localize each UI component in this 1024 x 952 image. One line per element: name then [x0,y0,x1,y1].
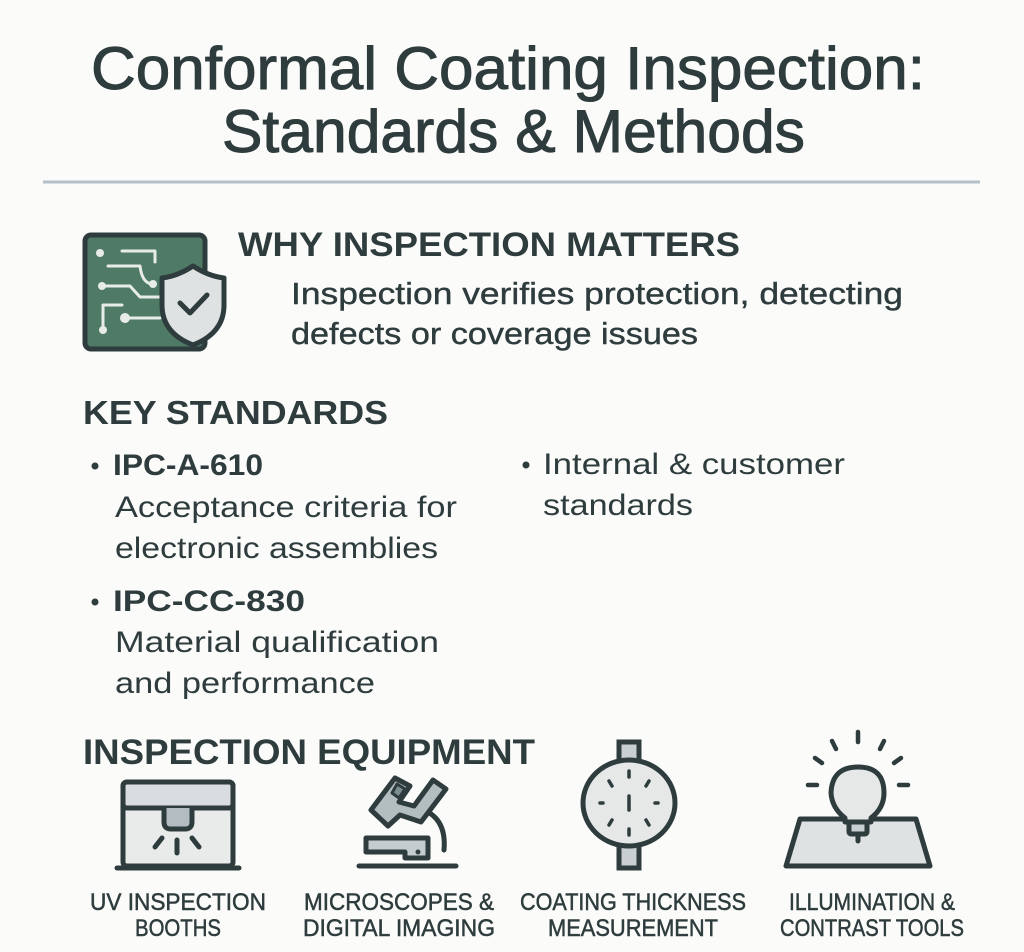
labels: equipment: UV INSPECTION [90,889,266,916]
icon: circuit board with shield [85,235,224,349]
standard: IPC-CC-830: Material qualification [115,626,439,659]
standard: IPC-A-610 [92,449,457,565]
standard: internal & customer: standards [543,489,693,522]
icon: UV booth [117,782,239,868]
text: why body: Inspection verifies protection, detecting [291,276,903,311]
labels: equipment: MEASUREMENT [548,915,718,942]
standard: internal & customer: Internal & customer [543,448,845,481]
standard: IPC-CC-830 [92,585,439,700]
icon: thickness gauge [583,742,675,868]
standard: IPC-CC-830: IPC-CC-830 [113,585,305,618]
text: why body: defects or coverage issues [291,316,698,351]
heading: inspection equipment: INSPECTION EQUIPMENT [83,733,535,772]
labels: equipment [90,889,964,942]
standard: IPC-CC-830: and performance [115,667,375,700]
labels: equipment: CONTRAST TOOLS [780,915,964,942]
title [91,35,925,165]
title: Standards & Methods [222,98,805,165]
heading: why inspection matters: WHY INSPECTION MATTERS [238,226,740,264]
labels: equipment: DIGITAL IMAGING [303,915,495,942]
standard: IPC-A-610: IPC-A-610 [113,449,263,482]
labels: equipment: BOOTHS [135,915,221,942]
title: Conformal Coating Inspection: [91,35,925,102]
standard: IPC-A-610: Acceptance criteria for [115,491,457,524]
standard: IPC-A-610: electronic assemblies [115,532,438,565]
text: why body [291,276,903,351]
heading: key standards: KEY STANDARDS [83,394,388,431]
labels: equipment: MICROSCOPES & [304,889,494,916]
standard: internal & customer [522,448,845,522]
icon: illumination [786,732,930,866]
icon: microscope [359,778,456,866]
labels: equipment: COATING THICKNESS [520,889,746,916]
labels: equipment: ILLUMINATION & [789,889,955,916]
